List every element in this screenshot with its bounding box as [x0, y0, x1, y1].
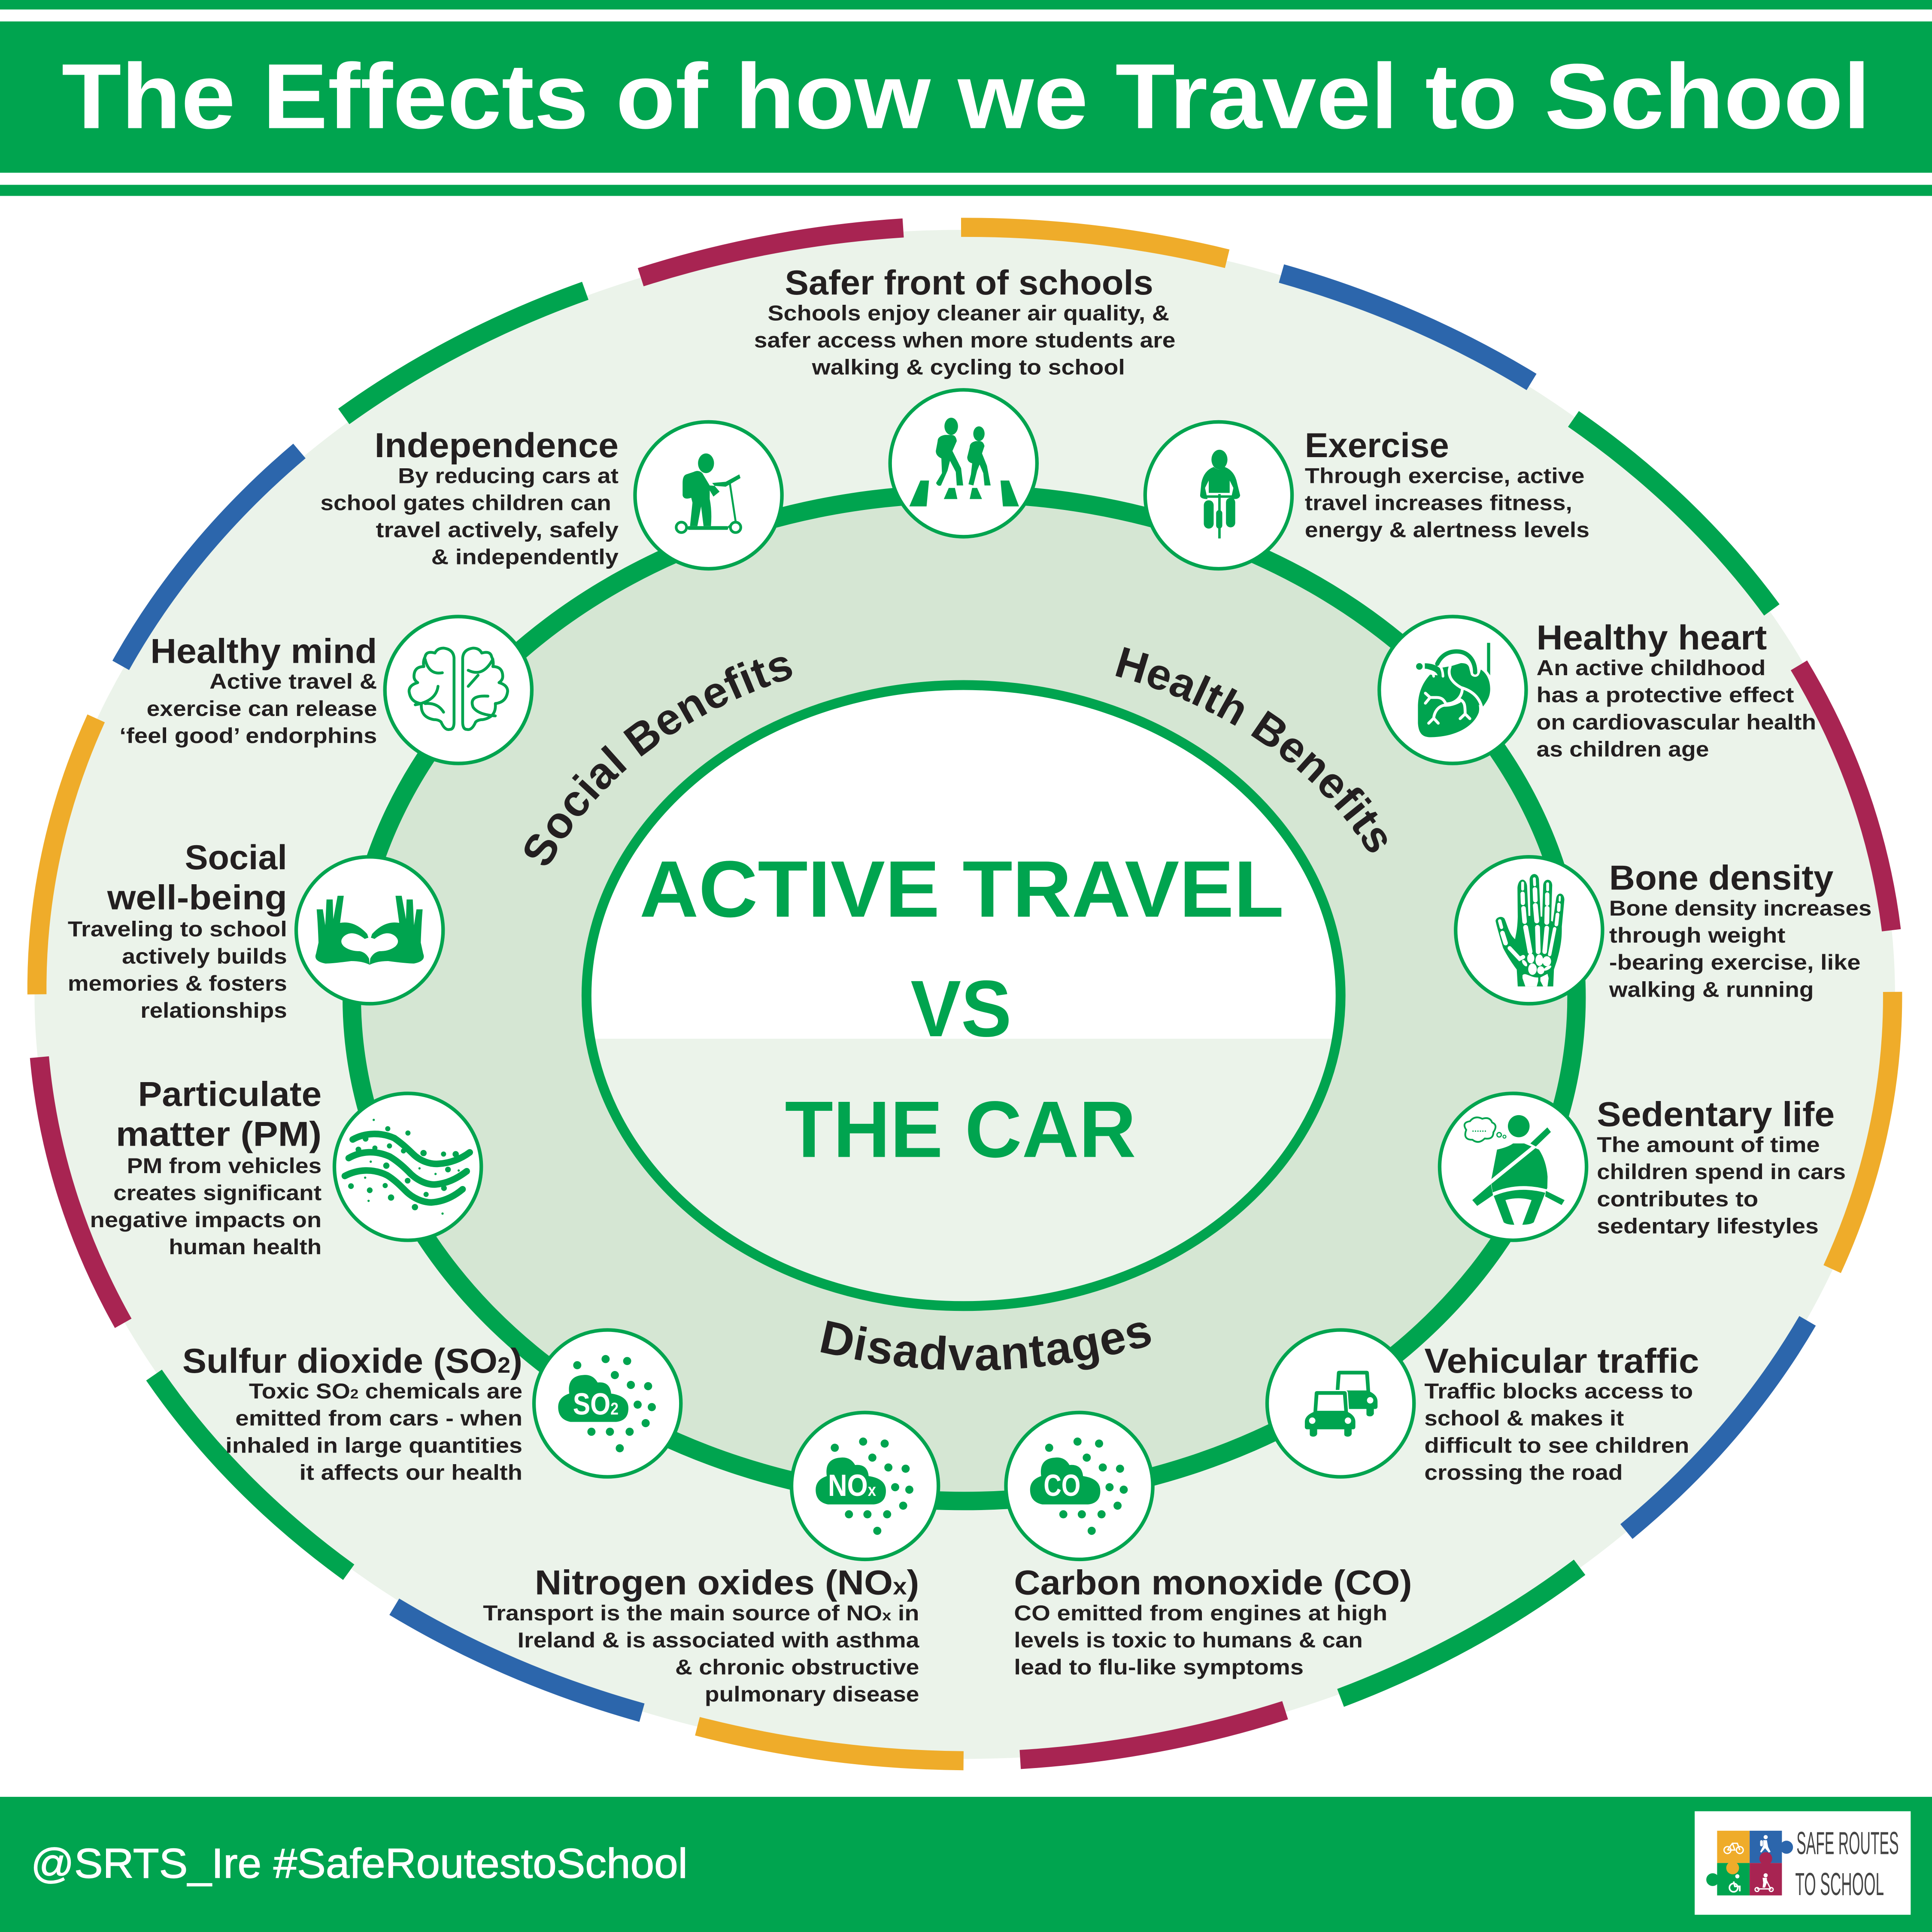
heading: well-being [107, 878, 287, 917]
body: sedentary lifestyles [1597, 1214, 1819, 1238]
icon: nitrogen oxides cloud: NOx [828, 1468, 877, 1503]
text: carbon monoxide [1014, 1563, 1412, 1679]
text: healthy mind [119, 632, 377, 748]
body [119, 670, 377, 748]
heading: Bone density [1609, 859, 1834, 898]
body: inhaled in large quantities [225, 1433, 522, 1457]
body: on cardiovascular health [1537, 710, 1816, 734]
body: school & makes it [1424, 1406, 1624, 1430]
body: Traffic blocks access to [1424, 1379, 1693, 1403]
body: By reducing cars at [398, 464, 619, 488]
body: walking & cycling to school [812, 355, 1125, 379]
title: The Effects of how we Travel to School [62, 45, 1870, 148]
logo: safe routes to school [1695, 1811, 1911, 1915]
body: as children age [1537, 737, 1709, 761]
body: children spend in cars [1597, 1160, 1846, 1184]
body: travel actively, safely [376, 518, 619, 542]
outer ellipse panel [34, 230, 1895, 1759]
body [483, 1601, 920, 1706]
body: negative impacts on [90, 1208, 321, 1232]
icon: pedestrian crossing [890, 390, 1037, 537]
heading: Particulate [138, 1075, 321, 1113]
body: Transport is the main source of NO x in [483, 1601, 919, 1625]
body: lead to flu-like symptoms [1014, 1655, 1304, 1679]
body [90, 1154, 322, 1259]
body: actively builds [122, 944, 287, 968]
icon: carbon monoxide cloud [1006, 1413, 1153, 1559]
heading: Sedentary life [1597, 1095, 1835, 1134]
body: energy & alertness levels [1305, 518, 1589, 542]
icon: traffic cars [1267, 1330, 1414, 1477]
body [1609, 896, 1871, 1001]
body: Through exercise, active [1305, 464, 1585, 488]
heading: Nitrogen oxides (NO x) [535, 1563, 919, 1602]
body: levels is toxic to humans & can [1014, 1628, 1363, 1652]
heading [116, 1075, 321, 1154]
icon: sulfur dioxide cloud: SO2 [573, 1387, 619, 1421]
icon: bones of the hand [1456, 857, 1602, 1004]
body [1424, 1379, 1693, 1485]
body: & chronic obstructive [675, 1655, 919, 1679]
text: nitrogen oxides [483, 1563, 920, 1706]
body: creates significant [113, 1181, 322, 1205]
text: vehicular traffic [1424, 1342, 1699, 1485]
header banner [0, 0, 1932, 196]
body: crossing the road [1424, 1461, 1623, 1485]
text: sedentary life [1597, 1095, 1846, 1238]
heading: matter (PM) [116, 1115, 321, 1154]
footer hashtag text: @SRTS_Ire #SafeRoutestoSchool [31, 1840, 688, 1887]
body: walking & running [1609, 977, 1814, 1001]
body: human health [169, 1235, 321, 1259]
body: Schools enjoy cleaner air quality, & [767, 301, 1169, 325]
heading: Independence [375, 426, 619, 465]
logo puzzle mark [1706, 1831, 1793, 1896]
body [68, 917, 287, 1022]
body: Traveling to school [68, 917, 287, 941]
body: The amount of time [1597, 1133, 1820, 1157]
body [1305, 464, 1589, 542]
icon: nitrogen oxides cloud [792, 1413, 938, 1559]
heading: Social [185, 838, 287, 877]
centre ellipse [586, 685, 1341, 1306]
heading [107, 838, 287, 917]
body: through weight [1609, 923, 1786, 947]
body: has a protective effect [1537, 683, 1794, 707]
body [754, 301, 1175, 379]
icon: child on scooter [635, 422, 782, 569]
text: bone density [1609, 859, 1871, 1001]
body: emitted from cars - when [235, 1406, 522, 1430]
centre heading: active travel: ACTIVE TRAVEL [640, 844, 1284, 934]
body: -bearing exercise, like [1609, 950, 1861, 974]
body: Active travel & [209, 670, 377, 694]
body: ‘feel good’ endorphins [119, 724, 377, 748]
icon: seat belt [1440, 1093, 1586, 1240]
heading: Healthy mind [150, 632, 377, 670]
text: safer front of schools [754, 264, 1175, 379]
body [1597, 1133, 1846, 1238]
heading: Exercise [1305, 426, 1449, 465]
body [225, 1379, 522, 1485]
logo wordmark [1795, 1825, 1899, 1902]
body: school gates children can [320, 491, 611, 515]
body [1537, 656, 1816, 761]
body: travel increases fitness, [1305, 491, 1572, 515]
centre heading: the car: THE CAR [785, 1084, 1136, 1174]
icon: carbon monoxide cloud: CO [1043, 1468, 1080, 1503]
icon: brain [385, 616, 532, 764]
text: exercise [1305, 426, 1589, 542]
text: particulate matter [90, 1075, 322, 1259]
text: sulfur dioxide [182, 1342, 522, 1485]
curved label: disadvantages: Disadvantages [815, 1303, 1158, 1381]
body: An active childhood [1537, 656, 1765, 680]
body: contributes to [1597, 1187, 1758, 1211]
body: safer access when more students are [754, 328, 1175, 352]
icon: sulfur dioxide cloud [534, 1330, 681, 1477]
icon: hands forming a heart [296, 857, 443, 1004]
icon: particulate waves [334, 1093, 481, 1240]
heading: Safer front of schools [785, 264, 1153, 302]
body: Bone density increases [1609, 896, 1871, 920]
text: social well-being [68, 838, 287, 1022]
footer banner [0, 1797, 1932, 1932]
body: relationships [140, 998, 287, 1022]
outer segmented coloured ring [37, 227, 1893, 1761]
heading: Sulfur dioxide (SO 2) [182, 1342, 522, 1380]
body [1014, 1601, 1387, 1679]
heading: Vehicular traffic [1424, 1342, 1699, 1380]
body: PM from vehicles [127, 1154, 321, 1178]
curved label: health benefits: Health Benefits [1110, 637, 1405, 862]
body: CO emitted from engines at high [1014, 1601, 1387, 1625]
text: healthy heart [1537, 619, 1816, 761]
icon: heart [1379, 616, 1526, 764]
curved label: social benefits: Social Benefits [512, 638, 799, 874]
body: memories & fosters [68, 971, 287, 995]
middle ring [352, 494, 1577, 1501]
icon: cyclist [1145, 422, 1292, 569]
body: Toxic SO 2 chemicals are [249, 1379, 522, 1403]
body: Ireland & is associated with asthma [518, 1628, 920, 1652]
body: difficult to see children [1424, 1433, 1689, 1457]
body: & independently [431, 545, 619, 569]
centre heading: vs: VS [910, 964, 1012, 1053]
body: it affects our health [300, 1461, 522, 1485]
heading: Carbon monoxide (CO) [1014, 1563, 1412, 1602]
heading: Healthy heart [1537, 619, 1767, 657]
body [320, 464, 619, 569]
text: independence [320, 426, 619, 569]
body: exercise can release [147, 697, 377, 721]
body: pulmonary disease [705, 1682, 919, 1706]
